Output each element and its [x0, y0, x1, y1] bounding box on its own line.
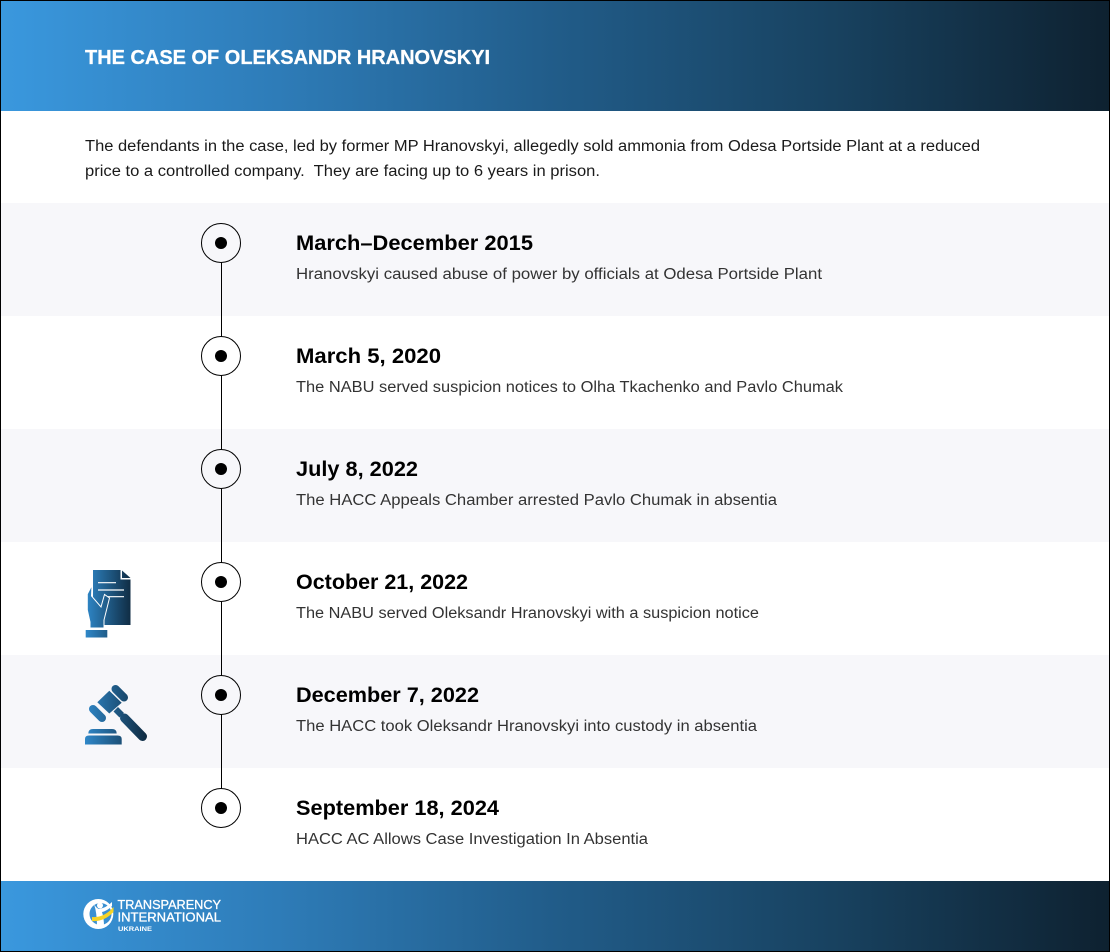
icon: hand holding document	[86, 570, 130, 638]
event 6	[296, 797, 648, 848]
logo: Transparency International Ukraine: UKRAINE	[118, 926, 153, 933]
footer banner	[0, 881, 1110, 952]
timeline marker 3	[202, 450, 240, 488]
event 1: March–December 2015	[296, 232, 533, 255]
event 4: October 21, 2022	[296, 571, 468, 594]
event 1: Hranovskyi caused abuse of power by officials at Odesa Portside Plant	[296, 266, 823, 283]
row backgrounds	[0, 203, 1110, 768]
title: THE CASE OF OLEKSANDR HRANOVSKYI	[85, 47, 490, 69]
event 2	[296, 345, 843, 396]
event 5: December 7, 2022	[296, 684, 479, 707]
intro text	[85, 138, 980, 180]
event 5: The HACC took Oleksandr Hranovskyi into custody in absentia	[296, 718, 757, 735]
event 3: July 8, 2022	[296, 458, 418, 481]
logo: Transparency International Ukraine	[83, 898, 222, 933]
event 3	[296, 458, 777, 509]
timeline marker 4	[202, 562, 240, 602]
timeline line	[220, 262, 222, 789]
timeline marker 2	[202, 336, 240, 376]
event 3: The HACC Appeals Chamber arrested Pavlo Chumak in absentia	[296, 492, 777, 509]
event 4	[296, 571, 759, 622]
event 4: The NABU served Oleksandr Hranovskyi with a suspicion notice	[296, 605, 759, 622]
event 2: March 5, 2020	[296, 345, 441, 368]
event 6: September 18, 2024	[296, 797, 499, 820]
event 2: The NABU served suspicion notices to Olha Tkachenko and Pavlo Chumak	[296, 379, 843, 396]
logo: Transparency International Ukraine: INTERNATIONAL	[118, 910, 221, 924]
event 1	[296, 232, 823, 283]
event 6: HACC AC Allows Case Investigation In Absentia	[296, 831, 648, 848]
timeline marker 5	[202, 676, 240, 714]
intro text: The defendants in the case, led by former MP Hranovskyi, allegedly sold ammonia from Odesa Portside Plant at a reduced	[85, 138, 980, 155]
icon: gavel	[85, 689, 142, 744]
timeline marker 1	[202, 224, 240, 262]
header banner	[0, 0, 1110, 111]
intro text: price to a controlled company. They are facing up to 6 years in prison.	[85, 163, 600, 180]
event 5	[296, 684, 757, 735]
logo: Transparency International Ukraine: TRANSPARENCY	[118, 898, 222, 912]
timeline marker 6	[202, 788, 240, 828]
